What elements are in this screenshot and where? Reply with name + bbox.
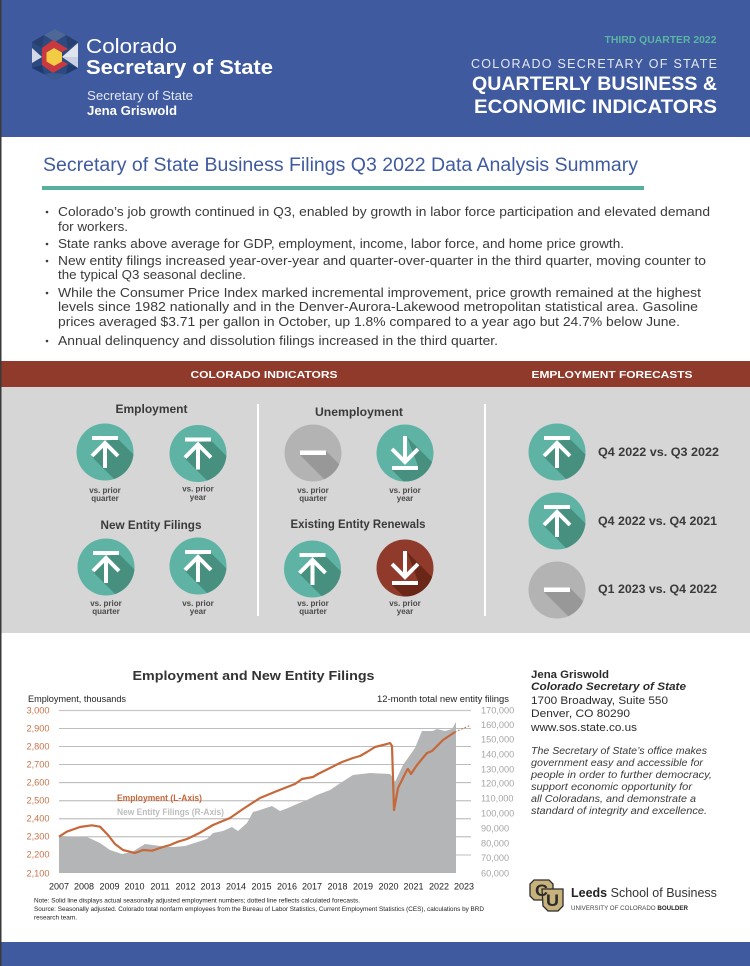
- x axis labels: 2007: [49, 882, 69, 892]
- forecast: Q4 2022 vs Q4 2021: Q4 2022 vs. Q4 2021: [598, 516, 718, 528]
- x axis labels: 2023: [454, 882, 474, 892]
- x axis labels: 2018: [327, 882, 348, 892]
- indicator: Employment: year: [190, 493, 206, 502]
- mission statement: support economic opportunity for: [531, 781, 693, 793]
- indicator: Employment: Employment: [116, 404, 188, 416]
- report title block: ECONOMIC INDICATORS: [474, 97, 717, 118]
- contact block: 1700 Broadway, Suite 550: [531, 695, 668, 707]
- icon: CU emblem: C: [535, 881, 548, 900]
- x axis labels: 2020: [378, 882, 399, 892]
- official name: Jena Griswold: [87, 104, 177, 118]
- left axis labels: [26, 706, 50, 878]
- summary bullets: Annual delinquency and dissolution filings increased in the third quarter.: [58, 333, 498, 348]
- logo wordmark: Secretary of State: [86, 56, 273, 79]
- indicator: Employment: vs. prior: [182, 484, 214, 494]
- header band: [0, 0, 750, 137]
- axis captions: 12-month total new entity filings: [377, 694, 510, 704]
- band heading: Employment forecasts: EMPLOYMENT FORECASTS: [532, 369, 692, 381]
- mission statement: all Coloradans, and demonstrate a: [531, 793, 696, 805]
- contact block: Denver, CO 80290: [531, 708, 630, 720]
- indicator: Unemployment: year: [397, 494, 413, 503]
- mission statement: [530, 745, 712, 817]
- new entity filings area: [59, 722, 456, 873]
- Leeds logo: UNIVERSITY OF COLORADO BOULDER: [571, 905, 689, 912]
- indicators panel: [0, 361, 750, 640]
- axis captions: [28, 694, 510, 704]
- contact block: www.sos.state.co.us: [530, 722, 638, 734]
- Leeds logo: [530, 880, 717, 912]
- left axis labels: 2,200: [26, 850, 50, 860]
- left axis labels: 2,800: [26, 742, 50, 752]
- left axis labels: 2,100: [26, 868, 50, 878]
- series labels: New Entity Filings (R-Axis): [117, 807, 224, 817]
- indicator: Existing Entity Renewals: Existing Entity Renewals: [290, 519, 426, 531]
- series labels: Employment (L-Axis): [117, 793, 202, 803]
- logo wordmark: Colorado: [86, 35, 177, 58]
- x axis labels: 2008: [74, 882, 94, 892]
- summary bullets: While the Consumer Price Index marked incremental improvement, price growth remained at the highest: [58, 285, 701, 300]
- indicator: Existing Entity Renewals: vs. prior: [389, 599, 421, 608]
- summary bullets: New entity filings increased year-over-year and quarter-over-quarter in the third quarter, moving counter to: [58, 253, 706, 268]
- left axis labels: 2,600: [26, 778, 50, 788]
- report title block: COLORADO SECRETARY OF STATE: [471, 57, 717, 71]
- summary bullets: for workers.: [58, 219, 128, 234]
- x axis labels: 2012: [175, 882, 196, 892]
- section heading: Secretary of State Business Filings Q3 2022 Data Analysis Summary: [43, 155, 639, 176]
- Leeds logo: Leeds School of Business: [571, 886, 717, 900]
- report title block: QUARTERLY BUSINESS &: [472, 74, 717, 95]
- summary bullets: [46, 204, 710, 348]
- chart note: research team.: [34, 914, 77, 922]
- indicator: Existing Entity Renewals: vs. prior: [297, 599, 329, 608]
- indicator: Existing Entity Renewals: year: [397, 607, 413, 616]
- x axis labels: [49, 882, 474, 892]
- x axis labels: 2014: [226, 882, 246, 892]
- chart note: [34, 898, 484, 922]
- x axis labels: 2021: [403, 882, 424, 892]
- x axis labels: 2013: [200, 882, 221, 892]
- contact block: [530, 669, 686, 734]
- right axis labels: 110,000: [481, 794, 514, 804]
- right axis labels: 70,000: [481, 853, 509, 863]
- right axis labels: 120,000: [481, 779, 514, 789]
- employment forecast dotted line: [455, 725, 471, 732]
- series labels: [117, 793, 224, 817]
- right axis labels: [481, 706, 514, 878]
- contact block: Jena Griswold: [531, 669, 609, 681]
- official name: Secretary of State: [87, 89, 193, 103]
- line and area chart: [26, 694, 514, 892]
- report title block: [471, 34, 717, 118]
- x axis labels: 2017: [302, 882, 322, 892]
- right axis labels: 100,000: [481, 808, 514, 818]
- right axis labels: 150,000: [481, 735, 514, 745]
- indicator: Employment: [76, 404, 248, 504]
- mission statement: standard of integrity and excellence.: [531, 805, 707, 817]
- right axis labels: 60,000: [481, 868, 509, 878]
- left axis labels: 2,500: [26, 796, 50, 806]
- summary bullets: the typical Q3 seasonal decline.: [58, 267, 246, 282]
- indicator: Unemployment: [284, 407, 455, 503]
- chart note: Source: Seasonally adjusted. Colorado total nonfarm employees from the Bureau of Labor Statistics, Current Employment Statistics (CES), calculations by BRD: [34, 906, 484, 913]
- forecast: Q1 2023 vs Q4 2022: Q1 2023 vs. Q4 2022: [598, 584, 717, 596]
- mission statement: government easy and accessible for: [531, 757, 704, 769]
- indicator: Employment: quarter: [91, 494, 119, 503]
- indicator: New Entity Filings: vs. prior: [182, 599, 214, 608]
- left axis labels: 2,700: [26, 760, 50, 770]
- mission statement: The Secretary of State’s office makes: [531, 745, 708, 757]
- x axis labels: 2011: [150, 882, 170, 892]
- summary bullets: levels since 1982 nationally and in the Denver-Aurora-Lakewood metropolitan statistical area. Gasoline: [58, 299, 698, 314]
- band heading: Colorado indicators: COLORADO INDICATORS: [190, 369, 338, 381]
- mission statement: people in order to further democracy,: [530, 769, 712, 781]
- indicator: Unemployment: vs. prior: [389, 486, 421, 495]
- right axis labels: 160,000: [481, 720, 514, 730]
- indicator: New Entity Filings: year: [190, 607, 206, 616]
- left axis labels: 2,400: [26, 814, 50, 824]
- logo: Colorado hexagon mark: [32, 29, 78, 80]
- x axis labels: 2019: [353, 882, 373, 892]
- right axis labels: 170,000: [481, 706, 514, 716]
- x axis labels: 2022: [429, 882, 449, 892]
- left axis labels: 2,900: [26, 724, 50, 734]
- indicator: New Entity Filings: New Entity Filings: [100, 520, 202, 532]
- logo wordmark: [86, 35, 273, 79]
- left axis labels: 3,000: [26, 706, 50, 716]
- indicator: Employment: vs. prior: [89, 486, 121, 495]
- forecast: Q4 2022 vs Q4 2021: [528, 492, 718, 571]
- contact block: Colorado Secretary of State: [531, 681, 686, 693]
- x axis labels: 2016: [277, 882, 297, 892]
- axis captions: Employment, thousands: [28, 694, 127, 704]
- forecast: Q1 2023 vs Q4 2022: [528, 562, 717, 640]
- footer band: [0, 942, 750, 966]
- summary bullets: Colorado’s job growth continued in Q3, enabled by growth in labor force participation and elevated demand: [58, 204, 710, 219]
- x axis labels: 2009: [99, 882, 120, 892]
- chart note: Note: Solid line displays actual seasonally adjusted employment numbers; dotted line reflects calculated forecasts.: [34, 898, 360, 904]
- forecast: Q4 2022 vs Q3 2022: Q4 2022 vs. Q3 2022: [598, 447, 719, 459]
- indicator: New Entity Filings: [78, 520, 248, 617]
- summary bullets: prices averaged $3.71 per gallon in October, up 1.8% compared to a year ago but 24.7% below June.: [58, 314, 680, 329]
- indicator: New Entity Filings: quarter: [92, 607, 120, 616]
- right axis labels: 80,000: [481, 838, 509, 848]
- employment line: [59, 732, 455, 853]
- right axis labels: 90,000: [481, 823, 509, 833]
- summary bullets: State ranks above average for GDP, employment, income, labor force, and home price growth.: [58, 236, 624, 251]
- right axis labels: 140,000: [481, 750, 514, 760]
- indicator: Unemployment: Unemployment: [315, 407, 403, 419]
- forecast: Q4 2022 vs Q3 2022: [528, 424, 719, 502]
- x axis labels: 2015: [251, 882, 272, 892]
- report title block: THIRD QUARTER 2022: [604, 34, 717, 46]
- indicator: Unemployment: quarter: [299, 494, 327, 503]
- indicator: Existing Entity Renewals: quarter: [299, 607, 327, 616]
- official name: [87, 89, 193, 118]
- right axis labels: 130,000: [481, 764, 514, 774]
- x axis labels: 2010: [124, 882, 145, 892]
- indicator: Unemployment: vs. prior: [297, 486, 329, 495]
- icon: CU emblem: U: [546, 891, 559, 910]
- left axis labels: 2,300: [26, 832, 50, 842]
- icon: CU emblem: [530, 880, 563, 911]
- indicator: New Entity Filings: vs. prior: [90, 599, 122, 608]
- indicator: Existing Entity Renewals: [284, 519, 455, 619]
- chart title: Employment and New Entity Filings: [132, 668, 374, 683]
